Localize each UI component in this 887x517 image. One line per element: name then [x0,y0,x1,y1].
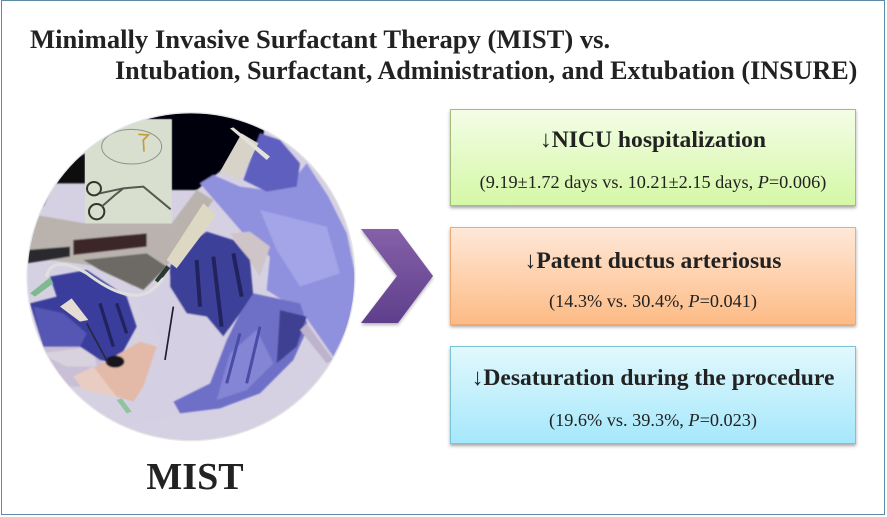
statistics: (19.6% vs. 39.3%, P=0.023) [549,410,757,430]
glove finger creases [197,253,242,327]
panel: NICU hospitalization [450,109,856,206]
arrow chevron [361,229,433,323]
title: Intubation, Surfactant, Administration, and Extubation (INSURE) [115,56,857,85]
dark upper background [145,113,265,192]
lower light glove [173,293,308,413]
inset photo of catheter and forceps [85,119,172,223]
heading: ↓Desaturation during the procedure [472,365,834,391]
right hand light glove [200,163,355,357]
MIST label: MIST [146,456,244,498]
syringe [167,203,217,268]
illustration: MIST procedure photo in circle [26,112,434,442]
panel: desaturation during the procedure [450,346,856,444]
tubing and connector [47,264,163,295]
bed sheet [113,273,233,430]
heading: ↓NICU hospitalization [540,127,766,153]
dark centre glove [170,232,253,337]
statistics: (14.3% vs. 30.4%, P=0.041) [549,291,757,311]
statistics: (9.19±1.72 days vs. 10.21±2.15 days, P=0.006) [480,172,826,192]
title: Minimally Invasive Surfactant Therapy (MIST) vs. [30,24,610,54]
heading: ↓Patent ductus arteriosus [525,248,781,274]
cuff [230,232,270,277]
baby face [93,342,157,402]
bench [27,190,213,287]
left hand dark glove [30,270,137,363]
title [30,24,857,85]
panel: patent ductus arteriosus [450,227,856,325]
